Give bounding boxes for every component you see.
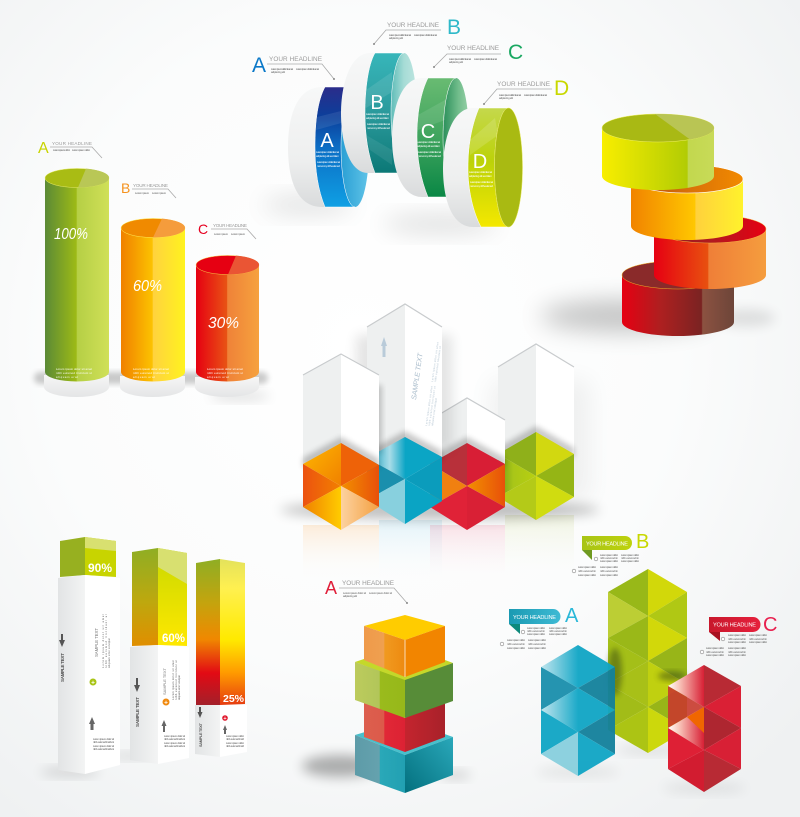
box shadows	[40, 753, 152, 776]
cube shadow	[302, 755, 471, 779]
prism C red	[668, 665, 741, 792]
tag C: nibh euismod tin	[749, 637, 768, 641]
label B: Lorem ipsum dolor sit amet	[414, 33, 437, 37]
label B: adipiscing elit	[389, 36, 403, 40]
label A: YOUR HEADLINE	[269, 56, 322, 63]
tag A: Lorem ipsum dolor	[528, 646, 546, 650]
tag B: Lorem ipsum dolor	[600, 559, 618, 563]
tower blue: Lorem ipsum dolor sit amet	[424, 386, 434, 426]
box 90%: Lorem ipsum dolor sit	[93, 737, 114, 741]
cylinder A 100%: nibh euismod tincidunt ut	[56, 371, 92, 375]
label C: Lorem ipsum dolor sit amet	[449, 57, 471, 61]
ring C: adipiscing elit sed diam	[417, 144, 441, 148]
tag B: Lorem ipsum dolor	[621, 553, 639, 557]
cylinder B 60%: nibh euismod tincidunt ut	[133, 371, 169, 375]
label D: Lorem ipsum dolor sit amet	[524, 93, 547, 97]
cylinder C 30%	[195, 256, 259, 397]
cube label A: Lorem ipsum dolor sit	[369, 591, 392, 595]
cylinder A 100%	[44, 168, 109, 397]
ring D: Lorem ipsum dolor sit amet	[470, 180, 493, 184]
label A: A	[252, 54, 266, 77]
ring A	[288, 87, 369, 207]
tag B: nibh euismod tin	[578, 569, 597, 573]
tag C: Lorem ipsum dolor	[728, 653, 746, 657]
tower blue: nibh euismod tincidunt ut	[427, 386, 437, 426]
tag B: Lorem ipsum dolor	[621, 559, 639, 563]
panel: hexagonal prisms	[500, 531, 777, 793]
cylinder C 30%: aliquam erat	[207, 375, 229, 379]
tag A: Lorem ipsum dolor	[528, 638, 546, 642]
ring D: adipiscing elit sed diam	[469, 174, 493, 178]
tag A: Lorem ipsum dolor	[527, 626, 545, 630]
tower blue: nibh euismod tincidunt ut	[433, 346, 442, 382]
label D	[483, 77, 569, 105]
label B: Lorem ipsum dolor sit amet	[389, 33, 411, 37]
tag B: YOUR HEADLINE	[586, 542, 628, 548]
tower orange	[303, 354, 382, 530]
prism shadows	[536, 746, 746, 793]
ring C	[392, 78, 469, 197]
tag A	[500, 605, 579, 650]
label A: Lorem ipsum dolor sit amet	[296, 67, 319, 71]
tag A: Lorem ipsum dolor	[549, 626, 567, 630]
cylinder label A: YOUR HEADLINE	[52, 141, 92, 146]
tower blue: Lorem ipsum dolor sit amet	[430, 342, 440, 382]
tag B: nibh euismod tin	[600, 569, 619, 573]
disk 1 lime	[602, 114, 714, 190]
cube green	[355, 645, 453, 718]
cylinder shadows	[34, 372, 270, 400]
tag C: nibh euismod tin	[728, 637, 747, 641]
label C: adipiscing elit	[449, 60, 463, 64]
box 60%: nibh euismod tincidunt ut	[174, 660, 178, 700]
panel: ring chart A to D	[252, 16, 569, 231]
tag C: Lorem ipsum dolor	[749, 633, 767, 637]
tag B: Lorem ipsum dolor	[600, 573, 618, 577]
ring shadows	[262, 198, 498, 231]
label A: adipiscing elit	[271, 70, 285, 74]
box 60%: Lorem ipsum dolor sit	[164, 734, 185, 738]
cylinder label C: Lorem ipsum	[231, 232, 245, 236]
tower blue: SAMPLE TEXT	[411, 352, 425, 400]
box 90%: 90%	[88, 561, 112, 575]
label D: D	[554, 77, 569, 100]
box 25%: 25%	[223, 693, 245, 705]
box 60%: Lorem ipsum dolor sit amet	[171, 660, 175, 700]
box 60%: 60%	[162, 633, 185, 645]
cylinder B 60%: aliquam erat	[133, 375, 155, 379]
tag B: Lorem ipsum dolor	[578, 565, 596, 569]
cylinder label B: Lorem ipsum	[152, 191, 166, 195]
panel: stacked disks	[540, 114, 775, 336]
tag A: Lorem ipsum dolor	[527, 632, 545, 636]
box 90%: aliquam erat volutpat	[107, 638, 111, 668]
tag C: Lorem ipsum dolor	[728, 646, 746, 650]
cube label A: Lorem ipsum dolor sit	[343, 591, 366, 595]
cylinder label A	[38, 140, 102, 158]
panel: cylinder chart	[34, 140, 270, 400]
cylinder B 60%: 60%	[133, 278, 162, 295]
box 25%: nibh euismod tincid	[226, 744, 245, 748]
label B: YOUR HEADLINE	[387, 22, 439, 29]
tag A: Lorem ipsum dolor	[507, 638, 525, 642]
cube red	[364, 700, 445, 752]
ring C: Lorem ipsum dolor sit amet	[418, 150, 441, 154]
disk 2 orange	[631, 165, 743, 240]
disk shadow	[540, 300, 775, 332]
tag A: A	[565, 605, 579, 627]
tower blue	[356, 304, 452, 524]
box 90%: SAMPLE TEXT	[94, 628, 99, 657]
box 25%: +	[223, 716, 227, 722]
label D: Lorem ipsum dolor sit amet	[499, 93, 521, 97]
prism A blue	[541, 645, 615, 776]
ring A: Lorem ipsum dolor sit amet	[316, 150, 339, 154]
ring C: nonummy nibh euismod	[418, 154, 441, 158]
tag B	[572, 531, 649, 577]
cylinder label B: Lorem ipsum	[135, 191, 149, 195]
label D: adipiscing elit	[499, 96, 513, 100]
tag A: YOUR HEADLINE	[513, 615, 556, 621]
ring C: C	[421, 121, 435, 143]
box 60%: SAMPLE TEXT	[135, 697, 140, 727]
cylinder label C	[198, 221, 256, 239]
cylinder B 60%: Lorem ipsum dolor sit amet	[133, 367, 169, 371]
tag A: Lorem ipsum dolor	[549, 632, 567, 636]
cylinder C 30%: Lorem ipsum dolor sit amet	[207, 367, 243, 371]
box 60%: nibh euismod tincidunt	[164, 737, 185, 741]
cylinder label C: Lorem ipsum	[214, 232, 228, 236]
box 90%: nibh euismod tincidunt	[93, 747, 114, 751]
ring B: Lorem ipsum dolor sit amet	[367, 122, 390, 126]
tower reflections	[303, 515, 574, 585]
cube teal	[355, 720, 453, 793]
ring B: adipiscing elit sed diam	[366, 116, 390, 120]
ring C: Lorem ipsum dolor sit amet	[417, 140, 440, 144]
tag B: nibh euismod tin	[621, 556, 640, 560]
ring A: Lorem ipsum dolor sit amet	[317, 160, 340, 164]
ring D: nonummy nibh euismod	[470, 184, 493, 188]
tag C: Lorem ipsum dolor	[749, 640, 767, 644]
box 25%	[195, 559, 247, 757]
ring D: D	[473, 151, 487, 173]
cylinder A 100%: Lorem ipsum dolor sit amet	[56, 367, 92, 371]
panel: hexagon towers	[280, 304, 600, 585]
ring A: A	[320, 130, 334, 152]
disk 4 dark red	[622, 261, 734, 336]
label B	[373, 16, 461, 45]
cylinder label C: YOUR HEADLINE	[213, 223, 247, 228]
ring D	[443, 108, 522, 227]
ring D: Lorem ipsum dolor sit amet	[469, 170, 492, 174]
box 60%: aliquam erat volutpat	[177, 675, 181, 700]
label C: C	[508, 41, 523, 64]
cylinder C 30%: 30%	[208, 315, 239, 332]
tag C	[700, 614, 777, 657]
tag A: Lorem ipsum dolor	[507, 646, 525, 650]
box 90%: SAMPLE TEXT	[60, 653, 65, 682]
tag B: nibh euismod tin	[600, 556, 619, 560]
label C	[433, 41, 523, 68]
tag C: Lorem ipsum dolor	[728, 633, 746, 637]
cylinder label C: C	[198, 221, 208, 237]
tag B: B	[636, 531, 649, 553]
box 90%: nibh euismod tincidunt	[93, 740, 114, 744]
cube label A: A	[325, 578, 337, 598]
box 25%: Lorem ipsum dolor	[226, 734, 244, 738]
tag B: Lorem ipsum dolor	[600, 565, 618, 569]
ring A: nonummy nibh euismod	[317, 164, 340, 168]
label D: YOUR HEADLINE	[497, 81, 550, 88]
box 90%: nibh euismod tincidunt ut	[104, 614, 108, 668]
box 90%: Lorem ipsum dolor sit	[93, 744, 114, 748]
ring B	[341, 53, 417, 173]
box 60%: +	[164, 700, 168, 706]
tag C: Lorem ipsum dolor	[706, 653, 724, 657]
tag A: nibh euismod tin	[549, 629, 568, 633]
tag C: C	[763, 614, 777, 636]
cylinder label A: Lorem ipsum dolor	[53, 148, 70, 152]
tag B: Lorem ipsum dolor	[578, 573, 596, 577]
box 60%	[130, 548, 189, 764]
cylinder label B	[121, 180, 176, 198]
cylinder B 60%	[120, 218, 185, 397]
cylinder label B: B	[121, 180, 130, 196]
cylinder label A: Lorem ipsum dolor	[72, 148, 90, 152]
tag C: Lorem ipsum dolor	[706, 646, 724, 650]
tower green	[498, 344, 574, 520]
box 90%: +	[91, 680, 95, 686]
cylinder A 100%: aliquam erat	[56, 375, 78, 379]
box 60%: Lorem ipsum dolor sit	[164, 741, 185, 745]
ring B: Lorem ipsum dolor sit amet	[366, 112, 389, 116]
cylinder A 100%: 100%	[54, 226, 88, 243]
tag C: nibh euismod tin	[706, 650, 725, 654]
tower base shadow	[280, 380, 600, 519]
box 60%: SAMPLE TEXT	[162, 667, 167, 695]
tag A: nibh euismod tin	[527, 629, 546, 633]
tag A: nibh euismod tin	[507, 642, 526, 646]
tower blue: aliquam erat volutpat	[430, 398, 438, 426]
panel: column boxes	[40, 537, 247, 776]
ring B: nonummy nibh euismod	[367, 126, 390, 130]
tag B: Lorem ipsum dolor	[600, 553, 618, 557]
box 60%: nibh euismod tincidunt	[164, 744, 185, 748]
tag C: Lorem ipsum dolor	[728, 640, 746, 644]
box 25%: nibh euismod tincid	[226, 737, 245, 741]
cube label A: adipiscing elit	[343, 594, 357, 598]
cylinder label A: A	[38, 140, 49, 157]
ring A: adipiscing elit sed diam	[316, 154, 340, 158]
tag C: nibh euismod tin	[728, 650, 747, 654]
tower blue arrow	[381, 337, 387, 357]
box 25%: Lorem ipsum dolor	[226, 741, 244, 745]
cube label A	[325, 578, 408, 604]
cube orange	[364, 615, 445, 677]
tower red	[430, 398, 505, 530]
label C: Lorem ipsum dolor sit amet	[474, 57, 497, 61]
box 90%: Lorem ipsum dolor sit amet	[101, 614, 105, 668]
cylinder label B: YOUR HEADLINE	[133, 183, 168, 188]
box 25%: SAMPLE TEXT	[199, 722, 203, 747]
tag A: nibh euismod tin	[528, 642, 547, 646]
cube label A: YOUR HEADLINE	[342, 580, 394, 587]
label B: B	[447, 16, 461, 39]
tag C: YOUR HEADLINE	[713, 622, 756, 628]
panel: cube stack	[302, 578, 471, 793]
cylinder C 30%: nibh euismod tincidunt ut	[207, 371, 243, 375]
label A: Lorem ipsum dolor sit amet	[271, 67, 293, 71]
box 90%	[58, 537, 120, 774]
label C: YOUR HEADLINE	[447, 45, 499, 52]
disk 3 red	[654, 215, 766, 289]
prism B green	[608, 569, 687, 753]
ring B: B	[370, 92, 384, 114]
label A	[252, 54, 335, 80]
